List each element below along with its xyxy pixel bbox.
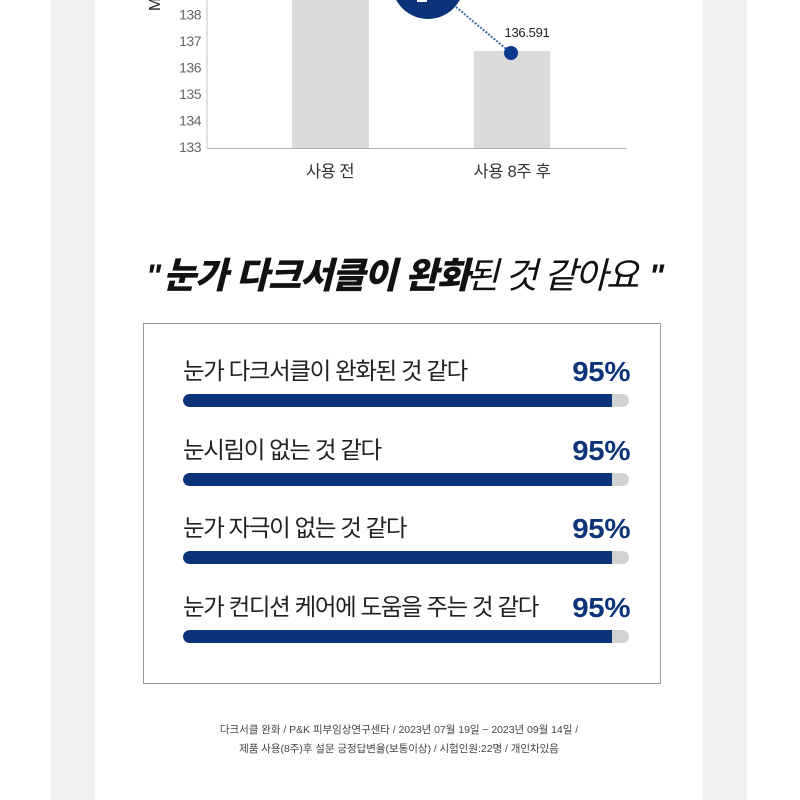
- heading: ": [146, 258, 161, 294]
- row 2 progress bar: [183, 473, 629, 486]
- heading: 눈가 다크서클이 완화: [163, 255, 469, 296]
- y axis tick labels: 134: [179, 112, 202, 128]
- survey row 3: [183, 513, 630, 564]
- row 1 percent: 95%: [572, 356, 630, 387]
- row 4 progress bar: [183, 630, 629, 643]
- data point marker: [504, 46, 518, 60]
- y axis tick labels: [179, 6, 202, 155]
- heading: 된 것 같아요: [466, 255, 637, 296]
- y axis tick labels: 136: [179, 60, 202, 76]
- panel: survey results: [143, 323, 661, 684]
- row 1 label: 눈가 다크서클이 완화된 것 같다: [183, 358, 467, 384]
- heading: [146, 255, 664, 296]
- y axis tick labels: 138: [179, 6, 202, 22]
- y axis tick labels: 133: [179, 139, 202, 155]
- bar: before use: [292, 0, 369, 148]
- row 1 progress bar: [183, 394, 629, 407]
- footnote: [220, 724, 578, 754]
- bar chart: before and after 8 weeks of use: [147, 0, 627, 181]
- row 2 label: 눈시림이 없는 것 같다: [183, 437, 381, 463]
- row 4 label: 눈가 컨디션 케어에 도움을 주는 것 같다: [183, 594, 538, 620]
- background side band: left: [51, 0, 95, 800]
- background side band: right: [703, 0, 747, 800]
- x axis label: before use: 사용 전: [306, 162, 354, 181]
- row 4 percent: 95%: [572, 592, 630, 623]
- row 3 label: 눈가 자극이 없는 것 같다: [183, 515, 406, 541]
- survey row 4: [183, 592, 630, 643]
- survey row 2: [183, 435, 630, 486]
- row 2 percent: 95%: [572, 435, 630, 466]
- y axis tick labels: 135: [179, 86, 202, 102]
- y axis tick labels: 137: [179, 33, 202, 49]
- footnote: 제품 사용(8주)후 설문 긍정답변율(보통이상) / 시험인원:22명 / 개인차있음: [239, 742, 559, 754]
- dotted connector line: [456, 7, 511, 53]
- x axis label: after 8 weeks: 사용 8주 후: [474, 162, 551, 181]
- footnote: 다크서클 완화 / P&K 피부임상연구센타 / 2023년 07월 19일 ~ 2023년 09월 14일 /: [220, 724, 578, 736]
- row 3 progress bar: [183, 551, 629, 564]
- callout circle: [392, 0, 464, 19]
- survey row 1: [183, 356, 630, 407]
- heading: ": [649, 258, 664, 294]
- bar: after 8 weeks: [474, 51, 550, 148]
- row 3 percent: 95%: [572, 513, 630, 544]
- value label: 136.591: [505, 25, 550, 40]
